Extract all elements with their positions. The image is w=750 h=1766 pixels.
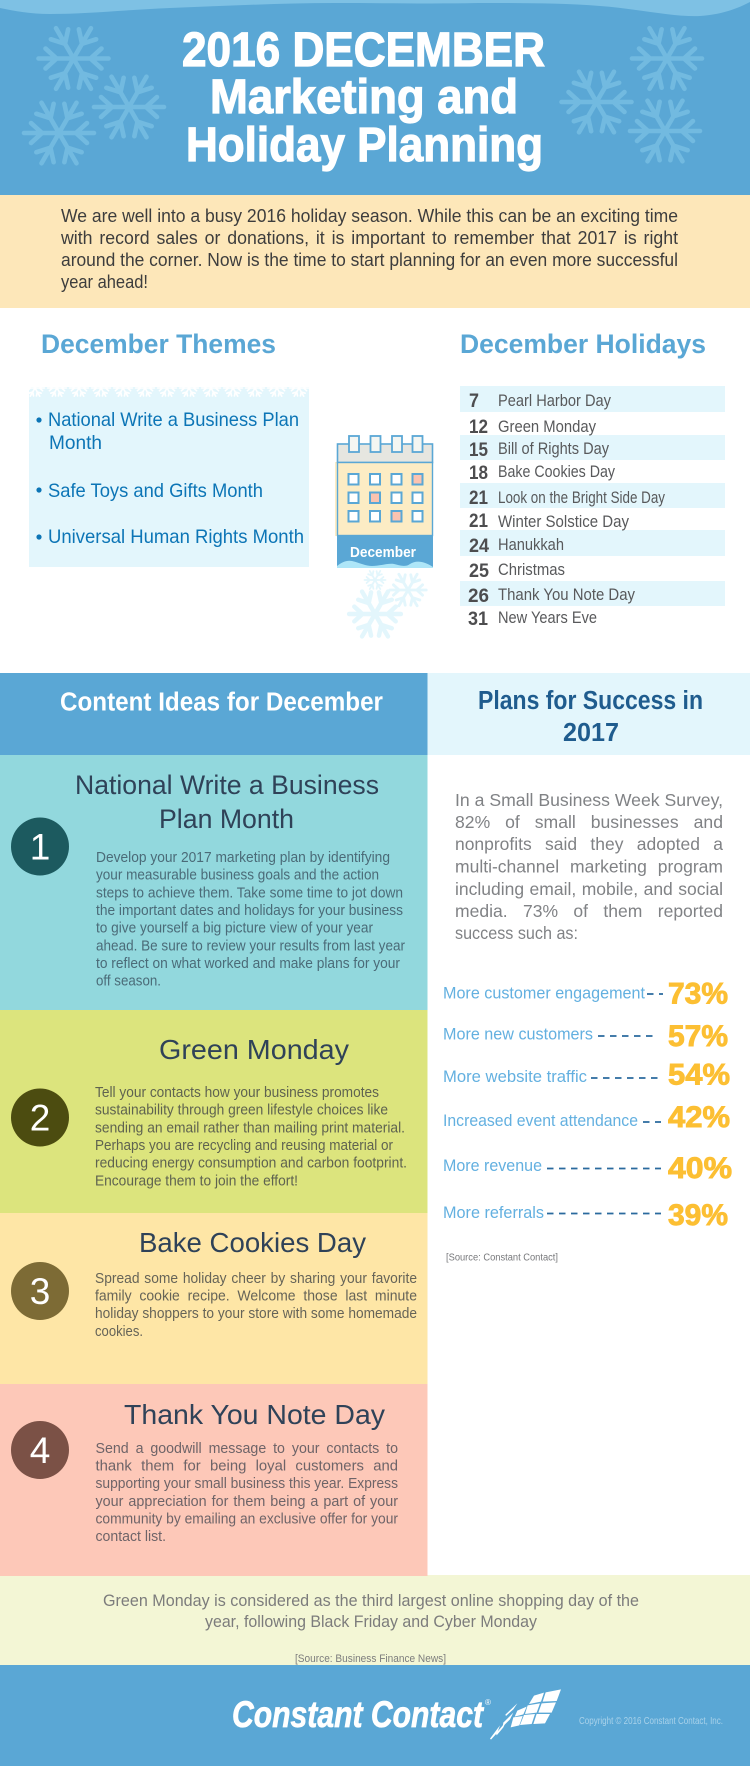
- heading: plans for success: Plans for Success in: [478, 687, 703, 715]
- intro text: year ahead!: [61, 272, 148, 292]
- source: Business Finance News: [Source: Business Finance News]: [295, 1653, 446, 1665]
- stat percentages: 73%: [668, 978, 728, 1010]
- icon: snowflakes left: [24, 23, 164, 168]
- icon: calendar: [335, 436, 433, 568]
- idea 3 body: cookies.: [95, 1324, 143, 1340]
- source: Constant Contact: [Source: Constant Contact]: [446, 1252, 558, 1264]
- panel: holidays list: [460, 386, 725, 630]
- top wave: [0, 0, 750, 16]
- text block: survey paragraph: success such as:: [455, 923, 578, 943]
- idea 4 body: Send a goodwill message to your contacts to: [96, 1441, 398, 1457]
- holiday dates: 12: [469, 416, 488, 438]
- text block: survey paragraph: multi-channel marketing program: [455, 856, 723, 876]
- idea 2 body: sending an email rather than mailing print material.: [95, 1120, 405, 1136]
- holiday dates: 21: [469, 487, 488, 509]
- holiday dates: 21: [469, 510, 488, 532]
- idea 4 body: supporting your small business this year. Express: [96, 1476, 398, 1492]
- note text: [103, 1591, 639, 1631]
- holiday names: Bill of Rights Day: [498, 440, 610, 458]
- idea 1 body: Develop your 2017 marketing plan by identifying: [96, 850, 390, 866]
- stat percentages: 42%: [668, 1101, 730, 1134]
- stat labels: [443, 984, 645, 1222]
- heading: December Themes: December Themes: [41, 329, 276, 359]
- text block: survey paragraph: nonprofits said they adopted a: [455, 834, 723, 854]
- title: [182, 24, 545, 172]
- stat labels: More website traffic: [443, 1068, 587, 1086]
- holiday dates: 25: [469, 560, 489, 582]
- idea 1 body: ahead. Be sure to review your results from last year: [96, 938, 405, 954]
- panel: themes list: [26, 378, 309, 567]
- heading: content ideas: Content Ideas for December: [60, 688, 383, 716]
- idea 3 body: holiday shoppers to your store with some homemade: [95, 1306, 417, 1322]
- intro text: We are well into a busy 2016 holiday season. While this can be an exciting time: [61, 206, 678, 226]
- idea 1 body: steps to achieve them. Take some time to jot down: [96, 885, 403, 901]
- idea 4 number badge: [11, 1421, 69, 1479]
- idea 4 body: contact list.: [96, 1529, 166, 1545]
- holiday names: Thank You Note Day: [498, 586, 636, 604]
- idea 4 body: [96, 1441, 398, 1545]
- stat percentages: [668, 978, 732, 1232]
- holiday dates: 7: [469, 390, 479, 412]
- title: Marketing and: [210, 71, 518, 124]
- idea 4 body: thank them for being loyal customers and: [96, 1458, 398, 1474]
- chart: success stats: [443, 978, 732, 1232]
- idea 1 body: [96, 850, 405, 990]
- idea 3 body: family cookie recipe. Welcome those last minute: [95, 1288, 417, 1304]
- stat labels: Increased event attendance: [443, 1112, 638, 1130]
- idea 1 heading: [75, 770, 379, 834]
- text block: survey paragraph: In a Small Business Week Survey,: [455, 790, 723, 810]
- idea 1 body: to reflect on what worked and make plans for your: [96, 956, 400, 972]
- heading: December Holidays: December Holidays: [460, 329, 706, 359]
- panel: Green Monday note: [0, 1575, 750, 1665]
- panel: content ideas header: [0, 673, 428, 755]
- panel: idea 4 Thank You Note Day: [0, 1384, 428, 1576]
- panel: idea 1 National Write a Business Plan Month: [0, 755, 428, 1010]
- text block: survey paragraph: [455, 790, 723, 943]
- panel: idea 2 Green Monday: [0, 1010, 428, 1213]
- idea 1 number badge: 1: [30, 826, 50, 868]
- stat labels: More new customers: [443, 1026, 593, 1044]
- panel: header banner: [0, 0, 750, 195]
- idea 2 body: Tell your contacts how your business promotes: [95, 1085, 379, 1101]
- holiday names: Winter Solstice Day: [498, 513, 630, 531]
- holiday dates: 31: [468, 608, 488, 630]
- holiday names: [498, 392, 666, 627]
- idea 2 heading: Green Monday: [159, 1034, 349, 1065]
- holiday names: Bake Cookies Day: [498, 463, 616, 481]
- idea 4 number badge: 4: [30, 1430, 50, 1471]
- idea 2 body: Perhaps you are recycling and reusing material or: [95, 1138, 393, 1154]
- text block: survey paragraph: including email, mobile, and social: [455, 879, 723, 899]
- heading: plans for success: [478, 687, 703, 747]
- idea 1 body: to give yourself a big picture view of your year: [96, 921, 373, 937]
- holiday names: Look on the Bright Side Day: [498, 489, 666, 507]
- stat percentages: 54%: [668, 1058, 730, 1092]
- theme items: Universal Human Rights Month: [48, 526, 304, 548]
- idea 3 heading: Bake Cookies Day: [139, 1227, 366, 1258]
- holiday names: Green Monday: [498, 418, 597, 436]
- icon: logo grid: [490, 1689, 561, 1740]
- intro text: with record sales or donations, it is important to remember that 2017 is right: [60, 228, 678, 248]
- panel: plans for success header: [428, 673, 750, 755]
- text block: survey paragraph: media. 73% of them reported: [455, 901, 723, 921]
- theme items: Safe Toys and Gifts Month: [48, 480, 263, 502]
- idea 2 body: sustainability through green lifestyle choices like: [95, 1103, 388, 1119]
- idea 4 heading: Thank You Note Day: [124, 1399, 385, 1430]
- note text: year, following Black Friday and Cyber Monday: [205, 1612, 537, 1631]
- icon: snowflakes right: [562, 23, 702, 166]
- theme items: Month: [49, 432, 102, 454]
- idea 3 body: Spread some holiday cheer by sharing your favorite: [95, 1271, 417, 1287]
- holiday dates: 18: [469, 462, 488, 484]
- holiday dates: 26: [468, 585, 489, 607]
- holiday names: Pearl Harbor Day: [498, 392, 612, 410]
- idea 2 body: reducing energy consumption and carbon footprint.: [95, 1156, 407, 1172]
- idea 1 heading: Plan Month: [159, 804, 294, 834]
- stat percentages: 39%: [668, 1199, 728, 1232]
- stat labels: More referrals: [443, 1204, 544, 1222]
- calendar label: December: [350, 544, 416, 561]
- holiday dates: 15: [469, 439, 488, 461]
- text block: survey paragraph: 82% of small businesses and: [455, 812, 723, 832]
- stat percentages: 57%: [668, 1020, 728, 1053]
- theme items: [36, 409, 304, 548]
- idea 2 number badge: [11, 1088, 69, 1146]
- title: Holiday Planning: [186, 119, 543, 172]
- idea 2 body: Encourage them to join the effort!: [95, 1173, 298, 1189]
- panel: idea 3 Bake Cookies Day: [0, 1213, 428, 1384]
- idea 1 heading: National Write a Business: [75, 770, 379, 800]
- holiday names: Hanukkah: [498, 536, 564, 554]
- note text: Green Monday is considered as the third largest online shopping day of the: [103, 1591, 639, 1610]
- heading: plans for success: 2017: [563, 719, 619, 747]
- theme items: National Write a Business Plan: [48, 409, 299, 431]
- idea 1 body: the important dates and holidays for your business: [96, 903, 403, 919]
- intro text: [60, 206, 678, 292]
- holiday names: New Years Eve: [498, 609, 597, 627]
- title: 2016 DECEMBER: [182, 24, 545, 77]
- idea 4 body: your appreciation for them being a part of your: [96, 1494, 398, 1510]
- holiday dates: 24: [469, 535, 489, 557]
- idea 2 number badge: 2: [30, 1098, 50, 1138]
- idea 1 body: off season.: [96, 974, 161, 990]
- logo wordmark: Constant Contact: [232, 1694, 484, 1735]
- stat labels: More revenue: [443, 1157, 542, 1175]
- logo registered mark: ®: [485, 1698, 491, 1707]
- stat percentages: 40%: [668, 1152, 732, 1185]
- idea 3 number badge: [11, 1262, 69, 1320]
- idea 3 number badge: 3: [30, 1271, 50, 1312]
- idea 3 body: [95, 1271, 417, 1340]
- idea 1 number badge: [11, 818, 69, 876]
- stat labels: More customer engagement: [443, 984, 645, 1002]
- icon: calendar snowflakes: [349, 569, 426, 640]
- intro text: around the corner. Now is the time to start planning for an even more successful: [61, 250, 678, 270]
- idea 2 body: [95, 1085, 407, 1189]
- holiday names: Christmas: [498, 561, 565, 579]
- holiday dates: [468, 390, 489, 630]
- panel: footer: [0, 1665, 750, 1766]
- idea 1 body: your measurable business goals and the action: [96, 868, 379, 884]
- idea 4 body: community by emailing an exclusive offer for your: [96, 1512, 398, 1528]
- panel: introduction: [0, 195, 750, 308]
